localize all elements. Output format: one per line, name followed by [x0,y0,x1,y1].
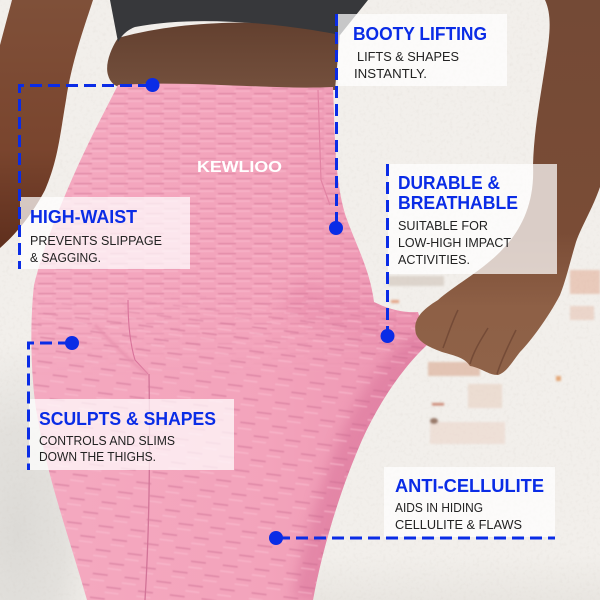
high-waist panel [20,197,190,269]
callout: high-waist [20,78,190,269]
durable heading: BREATHABLE [398,193,518,213]
durable leader line [380,164,394,343]
booty lifting description: INSTANTLY. [354,67,427,81]
durable heading [398,173,518,213]
booty lifting leader line [329,14,343,235]
anti-cellulite description: CELLULITE & FLAWS [395,518,522,532]
sculpts heading: SCULPTS & SHAPES [39,409,216,429]
sports bra [110,0,368,42]
anti-cellulite heading: ANTI-CELLULITE [395,476,544,496]
brand logo: KEWLIOO [197,159,282,176]
booty lifting heading: BOOTY LIFTING [353,24,487,44]
high-waist heading: HIGH-WAIST [30,207,137,227]
durable description: ACTIVITIES. [398,253,470,267]
callout: durable and breathable [380,164,557,343]
brick patches [352,270,600,444]
booty lifting description: LIFTS & SHAPES [357,50,459,64]
sculpts leader line [28,336,79,470]
left arm [0,0,93,248]
booty lifting panel [338,14,507,86]
durable heading: DURABLE & [398,173,500,193]
sculpts panel [29,399,234,470]
callout: sculpts and shapes [28,336,234,470]
durable description: SUITABLE FOR [398,219,488,233]
durable panel [388,164,557,274]
sculpts description [39,434,175,464]
high-waist description: PREVENTS SLIPPAGE [30,234,162,248]
anti-cellulite panel [384,467,555,537]
sculpts description: CONTROLS AND SLIMS [39,434,175,448]
high-waist leader line [20,78,160,269]
sculpts description: DOWN THE THIGHS. [39,450,156,464]
high-waist description: & SAGGING. [30,251,101,265]
high-waist description [30,234,162,265]
anti-cellulite description [395,501,522,532]
durable description: LOW-HIGH IMPACT [398,236,511,250]
anti-cellulite leader line [269,531,555,545]
callout: booty lifting [329,14,507,235]
durable description [398,219,511,267]
anti-cellulite description: AIDS IN HIDING [395,501,483,515]
pink leggings [31,84,427,600]
torso [107,23,340,90]
right arm and hand [415,0,600,375]
callout: anti-cellulite [269,467,555,545]
booty lifting description [354,50,459,81]
